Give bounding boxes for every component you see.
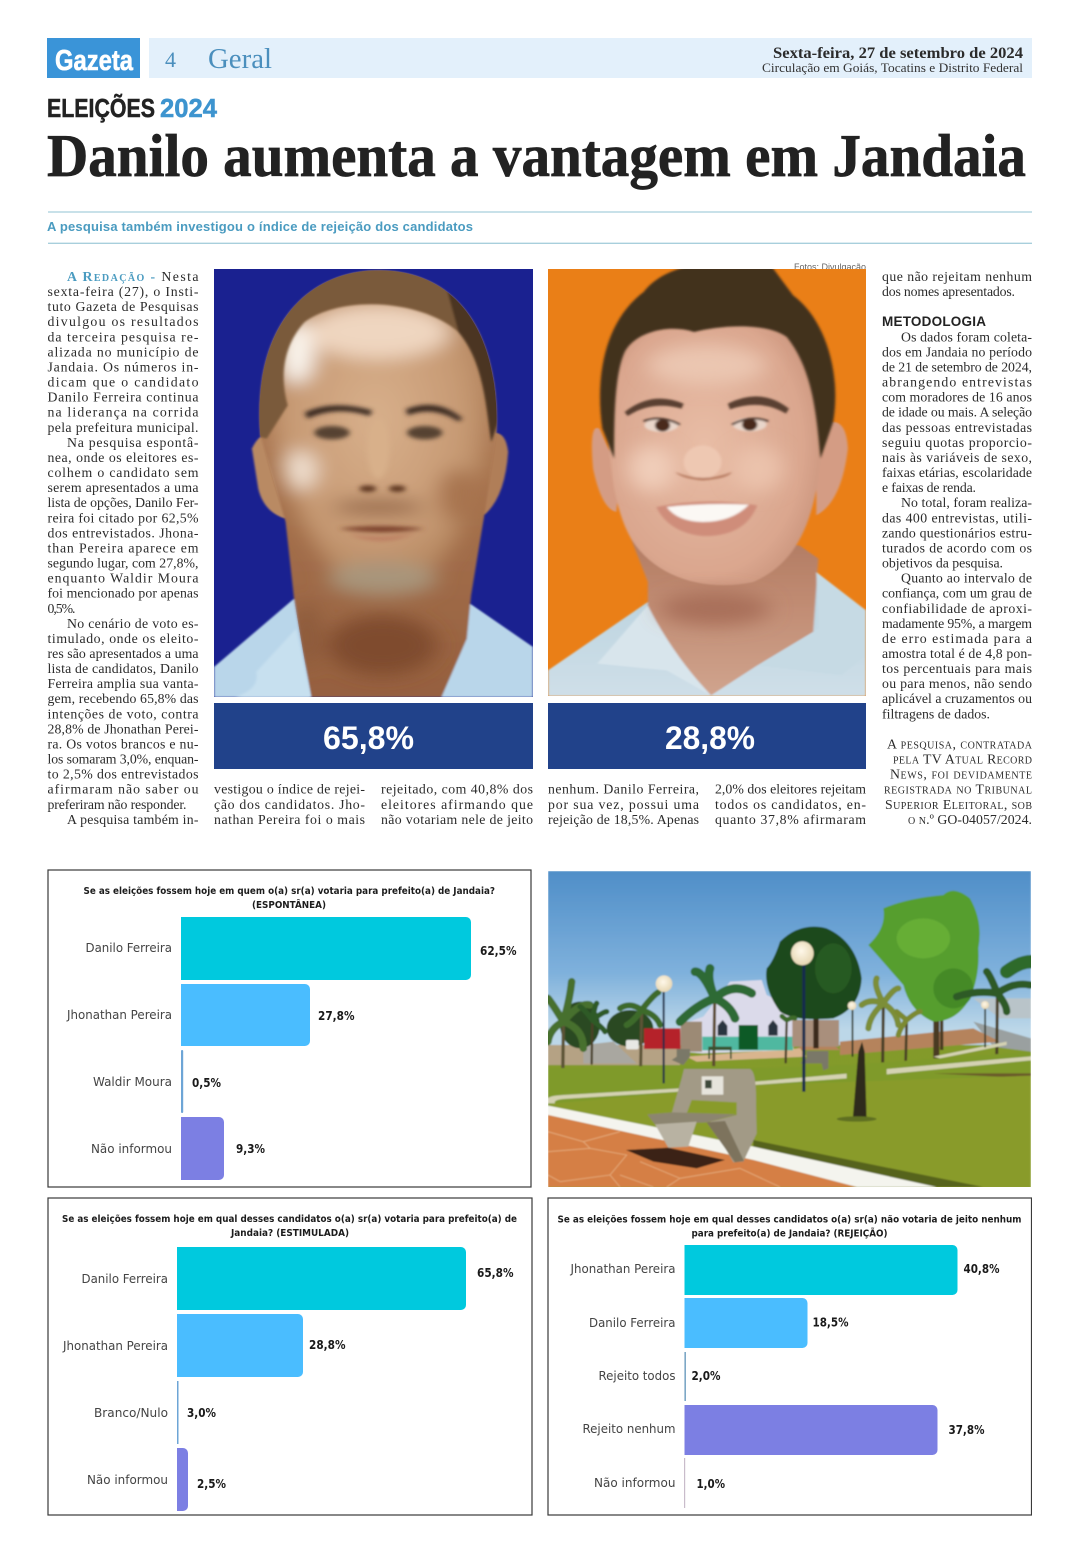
text column: left: na liderança na corrida bbox=[48, 405, 198, 420]
bar: Não informou 9,3%: Não informou bbox=[91, 1141, 172, 1156]
text column: left: timulado, onde os eleito- bbox=[48, 631, 199, 646]
bar: Jhonathan Pereira 28,8%: Jhonathan Pereira bbox=[62, 1338, 168, 1353]
text column: right with methodology: com moradores de 16 anos bbox=[882, 390, 1032, 405]
text column: right with methodology: zando questionários estru- bbox=[882, 525, 1032, 540]
percentage box: 65,8% bbox=[214, 703, 533, 769]
text columns under portraits: quanto 37,8% afirmaram bbox=[715, 812, 866, 827]
percentage box: 28,8%: 28,8% bbox=[665, 720, 755, 756]
text column: left: foi mencionado por apenas bbox=[48, 586, 198, 601]
bar: Danilo Ferreira 65,8%: Danilo Ferreira bbox=[82, 1271, 168, 1286]
header bar: page number, section and date: 4 bbox=[165, 47, 176, 72]
text column: left: segundo lugar, com 27,8%, bbox=[48, 556, 198, 570]
lamp posts bbox=[656, 941, 989, 1092]
ground bbox=[548, 1045, 1031, 1188]
text column: right with methodology: de erro estimada para a bbox=[882, 631, 1032, 646]
text column: left: alizada no município de bbox=[48, 344, 198, 359]
kicker: Eleições 2024: ELEIÇÕES bbox=[47, 93, 155, 123]
text column: right with methodology: A pesquisa, contratada bbox=[887, 736, 1033, 752]
bar: Branco/Nulo 3,0%: Branco/Nulo bbox=[94, 1405, 168, 1420]
text column: right with methodology: No total, foram realiza- bbox=[901, 495, 1032, 510]
chart title: Jandaia? (ESTIMULADA) bbox=[230, 1228, 349, 1239]
text columns under portraits: não votariam nele de jeito bbox=[381, 812, 533, 827]
text column: right with methodology: abrangendo entrevistas bbox=[882, 375, 1032, 390]
bar: Branco/Nulo 3,0% bbox=[94, 1381, 216, 1444]
bar: Não informou 1,0%: 1,0% bbox=[696, 1477, 724, 1491]
text column: right with methodology: nais às variáveis de sexo, bbox=[882, 450, 1032, 465]
chart: rejeição bbox=[547, 1197, 1032, 1516]
text column: right with methodology: filtragens de dados. bbox=[882, 706, 990, 721]
bar: Jhonathan Pereira 40,8%: 40,8% bbox=[963, 1262, 999, 1276]
text column: right with methodology: dos nomes apresentados. bbox=[882, 284, 1015, 299]
text column: left: 28,8% de Jhonathan Perei- bbox=[48, 721, 199, 736]
text column: right with methodology bbox=[882, 269, 1033, 827]
bar: Jhonathan Pereira 27,8%: 27,8% bbox=[318, 1009, 354, 1023]
bar: Jhonathan Pereira 27,8%: Jhonathan Pereira bbox=[66, 1007, 172, 1022]
text column: left: dicam que o candidato bbox=[48, 375, 199, 390]
bright green tree bbox=[868, 891, 980, 1058]
text column: left: Ferreira amplia sua vanta- bbox=[48, 676, 199, 691]
dirt mounds bbox=[793, 1028, 1000, 1055]
text column: left: than Pereira aparece em bbox=[48, 540, 199, 555]
bar: Não informou 9,3%: 9,3% bbox=[236, 1142, 265, 1156]
text column: left: sexta-feira (27), o Insti- bbox=[48, 284, 199, 300]
text column: right with methodology: das pessoas entrevistadas bbox=[882, 420, 1032, 435]
text column: left: da terceira pesquisa re- bbox=[48, 329, 199, 344]
kicker: Eleições 2024: 2024 bbox=[160, 95, 218, 123]
text column: left: Danilo Ferreira continua bbox=[48, 390, 198, 405]
lawn strip and walkways bbox=[548, 1052, 1031, 1187]
text column: left: enquanto Waldir Moura bbox=[48, 571, 198, 586]
text column: right with methodology: aplicável a cruzamentos ou bbox=[882, 691, 1032, 706]
text column: left: serem apresentados a uma bbox=[48, 480, 198, 495]
text column: right with methodology: de idade ou mais. A seleção bbox=[882, 405, 1032, 420]
bar: Não informou 2,5%: Não informou bbox=[87, 1472, 168, 1487]
bar: Jhonathan Pereira 40,8% bbox=[569, 1245, 999, 1295]
chart: estimulada bbox=[47, 1197, 533, 1516]
bar: Waldir Moura 0,5% bbox=[93, 1050, 221, 1113]
subtitle with rules: A pesquisa também investigou o índice de rejeição dos candidatos bbox=[47, 219, 473, 234]
text column: right with methodology: Os dados foram coleta- bbox=[901, 329, 1032, 344]
header bar: page number, section and date bbox=[149, 38, 1032, 78]
bar: Não informou 2,5% bbox=[87, 1448, 226, 1511]
text column: right with methodology: tos percentuais para mais bbox=[882, 661, 1032, 676]
portrait: Jhonathan Pereira on orange background bbox=[548, 269, 866, 696]
text column: left: intenções de voto, contra bbox=[48, 706, 198, 721]
bar: Rejeito todos 2,0%: 2,0% bbox=[691, 1369, 720, 1383]
bar: Não informou 1,0% bbox=[594, 1458, 724, 1508]
red wall bbox=[644, 1028, 681, 1049]
bar: Jhonathan Pereira 28,8% bbox=[62, 1314, 346, 1377]
text column: right with methodology: confiança, com um grau de bbox=[882, 586, 1032, 601]
text column: left: nea, onde os eleitores es- bbox=[48, 450, 199, 465]
text column: right with methodology: METODOLOGIA bbox=[882, 314, 986, 329]
text column: left: No cenário de voto es- bbox=[67, 616, 199, 631]
text column: left: preferiram não responder. bbox=[48, 797, 186, 812]
bar: Jhonathan Pereira 40,8%: Jhonathan Pereira bbox=[569, 1261, 675, 1276]
text column: right with methodology: News, foi devidamente bbox=[890, 767, 1032, 782]
text column: right with methodology: dos em Jandaia no período bbox=[882, 344, 1032, 359]
text column: right with methodology: e faixas de renda. bbox=[882, 480, 976, 495]
bar: Waldir Moura 0,5%: 0,5% bbox=[192, 1076, 221, 1090]
text column: right with methodology: registrada no Tribunal bbox=[884, 782, 1032, 797]
text column: right with methodology: pela TV Atual Record bbox=[893, 752, 1032, 767]
text columns under portraits: por sua vez, possui uma bbox=[548, 797, 699, 812]
text column: left: tuto Gazeta de Pesquisas bbox=[48, 299, 198, 314]
header bar: page number, section and date: Circulação em Goiás, Tocatins e Distrito Federal bbox=[762, 60, 1023, 75]
chart title: para prefeito(a) de Jandaia? (REJEIÇÃO) bbox=[691, 1226, 887, 1240]
text column: left: reira foi citado por 62,5% bbox=[48, 510, 199, 525]
text column: right with methodology: Quanto ao intervalo de bbox=[901, 571, 1032, 586]
bar: Danilo Ferreira 65,8%: 65,8% bbox=[477, 1266, 514, 1280]
text columns under portraits: vestigou o índice de rejei- bbox=[214, 782, 365, 797]
chart title bbox=[62, 1214, 517, 1239]
bar: Jhonathan Pereira 27,8% bbox=[66, 984, 355, 1046]
header bar: page number, section and date: Sexta-feira, 27 de setembro de 2024 bbox=[773, 45, 1023, 62]
text columns under portraits: eleitores afirmando que bbox=[381, 797, 533, 812]
bar: Não informou 9,3% bbox=[91, 1117, 265, 1180]
text column: right with methodology: o n.º GO-04057/2024. bbox=[908, 812, 1032, 827]
bar: Danilo Ferreira 62,5% bbox=[86, 917, 516, 980]
text column: left: A pesquisa também in- bbox=[67, 812, 199, 827]
text columns under portraits: 2,0% dos eleitores rejeitam bbox=[715, 782, 866, 797]
text column: left: afirmaram não saber ou bbox=[48, 782, 199, 797]
text column: right with methodology: confiabilidade de aproxi- bbox=[882, 601, 1032, 616]
bar: Danilo Ferreira 18,5%: 18,5% bbox=[812, 1316, 848, 1330]
bar: Danilo Ferreira 62,5%: 62,5% bbox=[480, 944, 516, 958]
text columns under portraits: ção dos candidatos. Jho- bbox=[214, 797, 365, 812]
text column: left: Na pesquisa espontâ- bbox=[67, 435, 199, 450]
text columns under portraits: rejeição de 18,5%. Apenas bbox=[548, 812, 699, 827]
chart title bbox=[84, 886, 495, 911]
text column: right with methodology: faixas etárias, escolaridade bbox=[882, 465, 1032, 480]
bar: Rejeito todos 2,0%: Rejeito todos bbox=[598, 1368, 675, 1383]
text column: left: colhem o candidato sem bbox=[48, 465, 199, 480]
photo: Jandaia square with bench, lamps and trees bbox=[548, 871, 1031, 1187]
text columns under portraits: todos os candidatos, en- bbox=[715, 797, 866, 812]
text columns under portraits: nathan Pereira foi o mais bbox=[214, 812, 365, 827]
text column: left: Jandaia. Os números in- bbox=[48, 360, 199, 374]
concrete bench bbox=[647, 1069, 757, 1162]
text column: left: to 2,5% dos entrevistados bbox=[48, 767, 198, 782]
text columns under portraits: rejeitado, com 40,8% dos bbox=[381, 782, 533, 797]
text column: left: pela prefeitura municipal. bbox=[48, 420, 198, 435]
text column: left: dos entrevistados. Jhona- bbox=[48, 525, 199, 540]
text column: right with methodology: amostra total é de 4,8 pon- bbox=[882, 646, 1032, 661]
bar: Danilo Ferreira 18,5%: Danilo Ferreira bbox=[588, 1315, 675, 1330]
text column: left: gem, recebendo 65,8% das bbox=[48, 691, 198, 706]
bar: Rejeito nenhum 37,8% bbox=[582, 1405, 984, 1455]
small trunk palm bbox=[853, 1042, 867, 1120]
bar: Não informou 1,0%: Não informou bbox=[594, 1475, 675, 1490]
dark background trees bbox=[560, 1002, 653, 1048]
text column: right with methodology: objetivos da pesquisa. bbox=[882, 556, 1003, 570]
text column: right with methodology: que não rejeitam nenhum bbox=[882, 269, 1032, 284]
bar: Não informou 2,5%: 2,5% bbox=[197, 1477, 226, 1491]
text column: left: lista de opções, Danilo Fer- bbox=[48, 495, 199, 510]
text column: right with methodology: das 400 entrevistas, utili- bbox=[882, 510, 1032, 525]
text column: left: divulgou os resultados bbox=[48, 314, 198, 329]
text column: left: A Redação - Nesta bbox=[67, 269, 198, 284]
bar: Rejeito todos 2,0% bbox=[598, 1352, 720, 1401]
palms bbox=[548, 962, 1031, 1088]
bar: Danilo Ferreira 62,5%: Danilo Ferreira bbox=[86, 940, 172, 955]
portrait: Danilo Ferreira on blue background bbox=[214, 269, 533, 697]
bar: Rejeito nenhum 37,8%: 37,8% bbox=[948, 1423, 984, 1437]
text column: right with methodology: ou para menos, não sendo bbox=[882, 676, 1032, 691]
chart title bbox=[557, 1214, 1021, 1240]
paved sidewalk and curb bbox=[548, 1106, 937, 1187]
text column: left: res são apresentados a uma bbox=[48, 646, 198, 661]
text column: right with methodology: seguiu quotas proporcio- bbox=[882, 435, 1032, 450]
background benches bbox=[672, 1047, 828, 1070]
chart title: (ESPONTÂNEA) bbox=[252, 898, 326, 911]
bar: Danilo Ferreira 18,5% bbox=[588, 1298, 848, 1348]
text column: left: ra. Os votos brancos e nu- bbox=[48, 736, 199, 752]
text column: left: lista de candidatos, Danilo bbox=[48, 661, 199, 676]
text column: right with methodology: de 21 de setembro de 2024, bbox=[882, 360, 1032, 374]
text column: right with methodology: madamente 95%, a margem bbox=[882, 616, 1032, 631]
bar: Branco/Nulo 3,0%: 3,0% bbox=[187, 1406, 216, 1420]
text column: left: 0,5%. bbox=[48, 601, 76, 616]
text column: right with methodology: Superior Eleitoral, sob bbox=[885, 797, 1032, 812]
percentage box: 28,8% bbox=[548, 703, 866, 769]
text column: left bbox=[48, 269, 199, 827]
bar: Jhonathan Pereira 28,8%: 28,8% bbox=[309, 1338, 346, 1352]
bar: Danilo Ferreira 65,8% bbox=[82, 1247, 514, 1310]
church bbox=[680, 980, 839, 1053]
text columns under portraits bbox=[214, 782, 866, 827]
bar: Rejeito nenhum 37,8%: Rejeito nenhum bbox=[582, 1421, 675, 1436]
text column: right with methodology: turados de acordo com os bbox=[882, 540, 1032, 555]
percentage box: 65,8%: 65,8% bbox=[323, 720, 414, 756]
header bar: page number, section and date: Geral bbox=[208, 43, 272, 75]
large dark tree bbox=[766, 927, 862, 1048]
text columns under portraits: nenhum. Danilo Ferreira, bbox=[548, 782, 699, 797]
lawn foreground bbox=[548, 1076, 1031, 1187]
chart: espontânea bbox=[47, 869, 532, 1188]
bar: Waldir Moura 0,5%: Waldir Moura bbox=[93, 1074, 172, 1089]
text column: left: los somaram 3,0%, enquan- bbox=[48, 752, 199, 767]
